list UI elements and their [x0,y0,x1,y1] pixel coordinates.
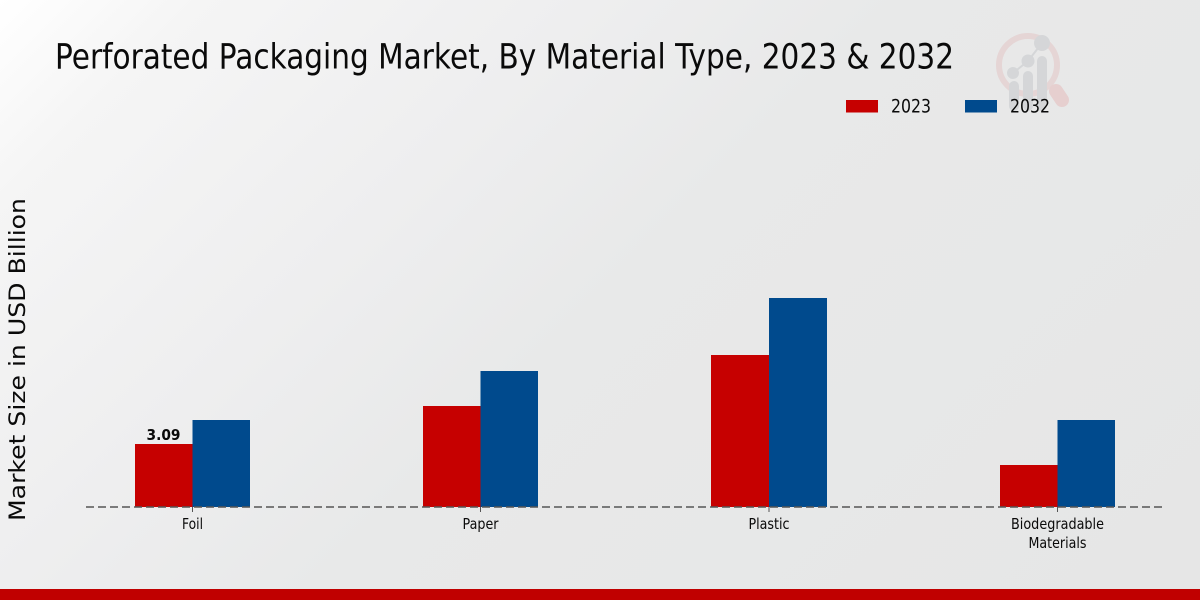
y axis label: Market Size in USD Billion [5,198,31,521]
legend [846,96,1050,118]
x axis baseline [86,506,1164,508]
category label: Biodegradable Materials: Materials [1028,534,1086,552]
group: Biodegradable Materials [1000,420,1115,507]
category label: Paper: Paper [462,515,499,533]
category label: Foil: Foil [182,515,203,533]
legend item: 2032: 2032 [1010,96,1050,118]
group: Plastic [711,298,827,507]
category label: Biodegradable Materials [1011,515,1104,552]
icon: watermark logo [999,35,1062,111]
legend item: 2023: 2023 [891,96,931,118]
category label: Plastic: Plastic [748,515,790,533]
group: Foil [135,420,250,507]
bar chart [86,298,1164,512]
legend item: 2023 [846,96,931,118]
category label: Biodegradable Materials: Biodegradable [1011,515,1104,533]
footer bar [0,589,1200,600]
legend item: 2032 [965,96,1050,118]
group: Paper [423,371,538,507]
group: Foil: 3.09 [146,426,180,444]
title: Perforated Packaging Market, By Material Type, 2023 & 2032 [55,38,954,78]
